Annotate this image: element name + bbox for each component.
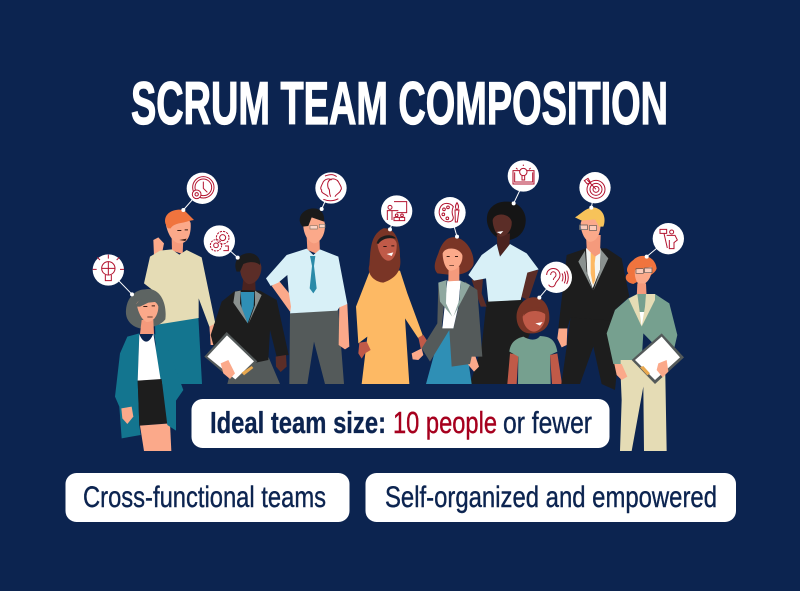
connector: book icon to woman with afro [514, 190, 520, 203]
team illustration: left group [93, 172, 349, 451]
callout: self-organized and empowered [366, 473, 736, 522]
connector: bulb icon to woman [108, 270, 132, 294]
connector: clock icon to tall man [183, 188, 202, 210]
connector: ear icon to child [539, 277, 556, 298]
connector dot: man in black [236, 256, 240, 260]
icon: target with arrow [579, 172, 611, 203]
connector dot: blond man [589, 206, 593, 210]
team illustration: right group [356, 160, 684, 451]
connector: tools icon to red-haired woman [647, 239, 668, 257]
connector dot: tall man [181, 208, 185, 212]
connector: palette icon to woman in gray jacket [454, 225, 457, 237]
person: red-haired woman in green blazer with clipboard [607, 256, 684, 451]
icon: clock with gear [187, 173, 218, 204]
callout: cross-functional teams: Cross-functional teams [83, 481, 326, 514]
icon: palette and brush [434, 197, 466, 228]
person: child in green shirt [507, 297, 562, 384]
person: man with glasses, light blue shirt and tie [266, 208, 349, 384]
icon: gears [204, 225, 235, 257]
icon: presenter at board [381, 195, 412, 227]
person: blond man in black suit [557, 207, 629, 390]
person: woman in gray jacket and blue skirt [412, 237, 482, 384]
connector dot: woman in gray jacket [455, 235, 459, 239]
callout: self-organized and empowered: Self-organized and empowered [385, 481, 717, 514]
person: woman in hijab and yellow dress [356, 228, 431, 384]
connector: training icon to hijab woman [390, 211, 397, 229]
callout: ideal team size [192, 399, 610, 448]
connector dot: child [537, 296, 541, 300]
connector: heads icon to man with tie [322, 188, 331, 209]
icon: open book with light bulb [508, 160, 539, 192]
connector dot: woman with afro [512, 201, 516, 205]
person: woman with afro and white blouse [468, 202, 539, 384]
person: woman in teal cardigan [115, 289, 183, 451]
person: dark-skinned man in black jacket with clipboard [204, 253, 289, 384]
connector dot: woman [130, 292, 134, 296]
connector: target icon to blond man [591, 188, 595, 208]
icon: ear with sound waves [541, 262, 572, 293]
callout: ideal team size: Ideal team size: [210, 405, 386, 440]
connector dot: hijab woman [388, 227, 392, 231]
icon: puzzle light bulb [93, 254, 124, 286]
connector: gears icon to man in black [219, 241, 238, 258]
connector dot: man with tie [320, 207, 324, 211]
icon: person with flag [653, 223, 684, 254]
icon: two heads [315, 172, 347, 204]
person: tall man in cream sweater [144, 210, 215, 384]
callout: cross-functional teams [66, 473, 350, 522]
callout: ideal team size: or fewer [503, 405, 592, 440]
connector dot: red-haired woman [645, 255, 649, 259]
callout: ideal team size: 10 people [393, 405, 497, 440]
